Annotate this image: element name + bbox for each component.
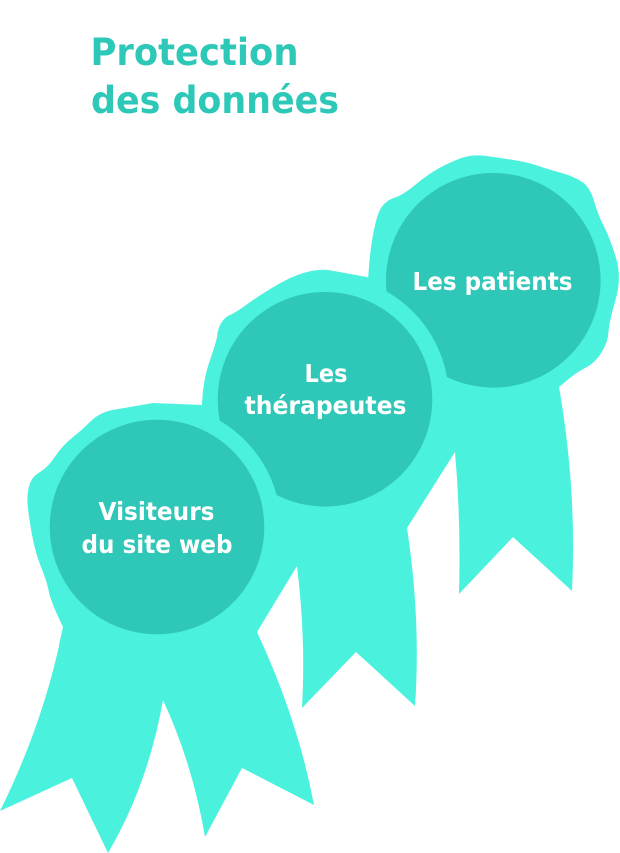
rosette: les thérapeutes bbox=[202, 270, 455, 570]
label: visiteurs du site web: du site web bbox=[82, 530, 232, 559]
label: les thérapeutes: Les bbox=[304, 359, 348, 388]
ribbon tails: visiteurs du site web bbox=[0, 627, 314, 853]
title bbox=[90, 31, 339, 122]
label: les thérapeutes: thérapeutes bbox=[244, 391, 406, 420]
ribbon tails: les patients bbox=[445, 370, 573, 594]
medal circle: les patients bbox=[386, 173, 601, 388]
label: les thérapeutes bbox=[244, 359, 406, 420]
medal circle: les thérapeutes bbox=[218, 292, 432, 507]
ribbon: visiteurs du site web bbox=[0, 403, 314, 853]
rosette: visiteurs du site web bbox=[27, 403, 297, 645]
ribbon: les patients bbox=[368, 155, 619, 594]
ribbon: les thérapeutes bbox=[202, 270, 455, 708]
medal circle: visiteurs du site web bbox=[50, 420, 264, 634]
label: visiteurs du site web: Visiteurs bbox=[98, 497, 214, 526]
title: Protection bbox=[90, 31, 298, 74]
label: les patients: Les patients bbox=[412, 267, 572, 296]
rosette: les patients bbox=[368, 155, 619, 420]
ribbon tails: les thérapeutes bbox=[297, 520, 417, 708]
title: des données bbox=[91, 79, 339, 122]
label: visiteurs du site web bbox=[82, 497, 232, 559]
